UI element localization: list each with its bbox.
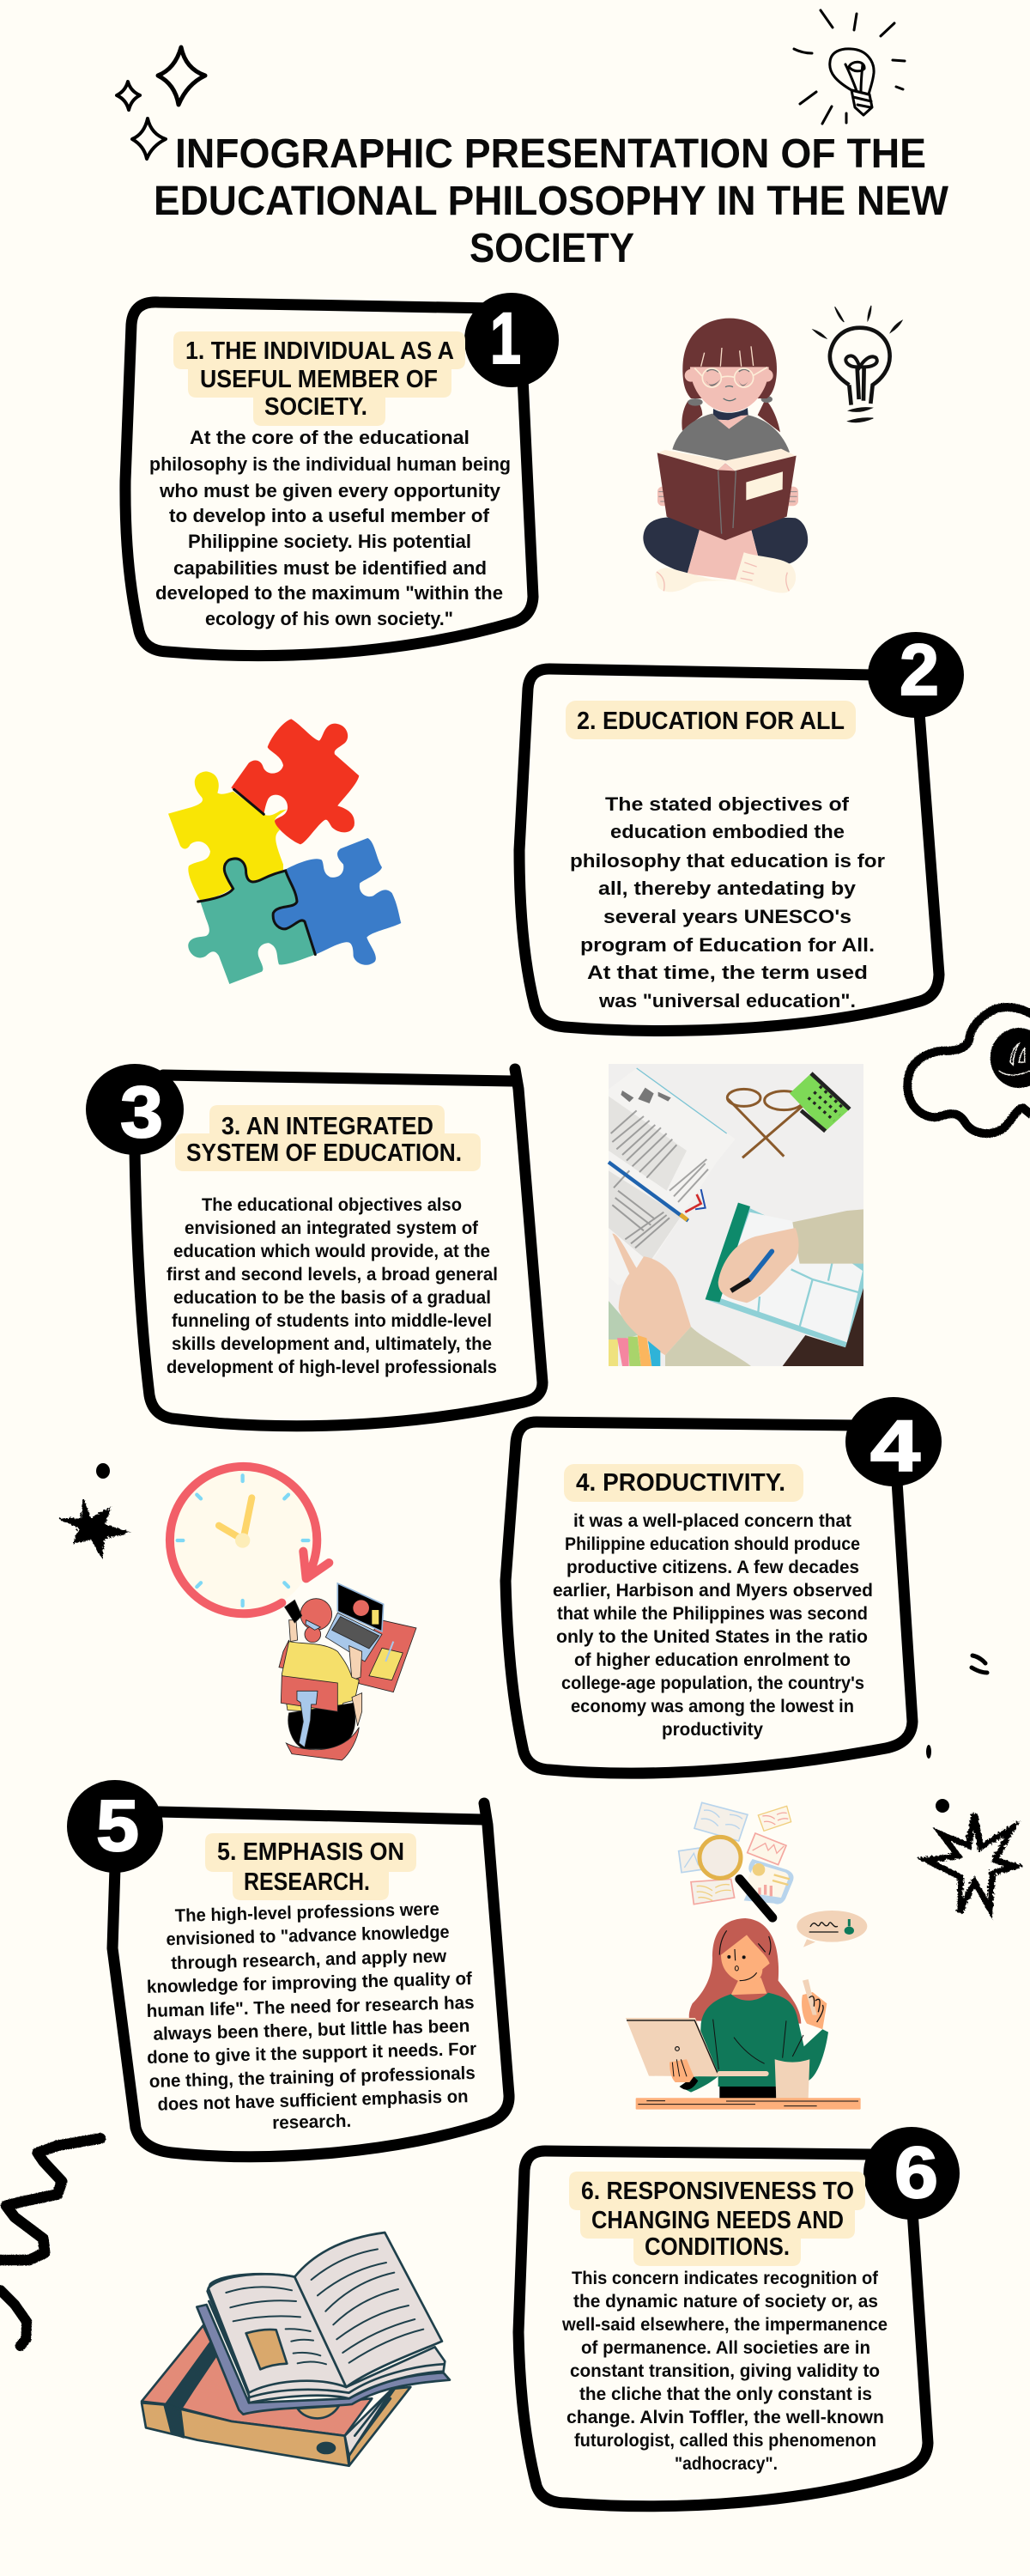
doodle: star left	[59, 1498, 127, 1555]
panel frame 3	[135, 1069, 542, 1426]
title: SOCIETY	[470, 226, 634, 271]
body text 3: funneling of students into middle-level	[172, 1311, 492, 1331]
body text 6: change. Alvin Toffler, the well-known	[566, 2408, 884, 2427]
heading 1: 1. THE INDIVIDUAL AS A	[185, 337, 454, 365]
body text 3: envisioned an integrated system of	[185, 1218, 479, 1238]
heading 2	[566, 701, 856, 739]
body text 3: education which would provide, at the	[173, 1242, 490, 1261]
body text 1: to develop into a useful member of	[169, 505, 490, 526]
heading 1	[173, 331, 465, 426]
body text 4: Philippine education should produce	[565, 1534, 860, 1554]
body text 5: The high-level professions were	[175, 1899, 439, 1926]
title	[154, 131, 949, 271]
body text 1: At the core of the educational	[190, 427, 470, 448]
body text 2: was "universal education".	[598, 990, 856, 1012]
body text 4: economy was among the lowest in	[571, 1697, 854, 1716]
number badge 2: 2	[900, 629, 939, 710]
body text 6: This concern indicates recognition of	[572, 2269, 879, 2288]
heading 4: 4. PRODUCTIVITY.	[576, 1469, 785, 1497]
body text 5: envisioned to "advance knowledge	[166, 1923, 450, 1949]
body text 5: one thing, the training of professionals	[149, 2063, 476, 2092]
body text 3: The educational objectives also	[202, 1195, 462, 1215]
heading 1: SOCIETY.	[264, 393, 367, 421]
number badge 4: 4	[870, 1406, 920, 1486]
icon: sparkles	[117, 47, 205, 159]
body text 6: of permanence. All societies are in	[581, 2338, 870, 2358]
panel frame 5	[112, 1803, 509, 2157]
body text 1: ecology of his own society."	[205, 608, 453, 629]
body text 5: human life". The need for research has	[146, 1993, 475, 2021]
panel: 3 integrated system	[86, 1064, 542, 1426]
heading 5	[205, 1833, 416, 1900]
body text 5: done to give it the support it needs. For	[147, 2039, 476, 2068]
body text 3: skills development and, ultimately, the	[172, 1334, 492, 1354]
body text 3: development of high-level professionals	[167, 1358, 497, 1377]
heading 6	[569, 2172, 865, 2266]
number badge 1	[464, 293, 559, 387]
body text 6: well-said elsewhere, the impermanence	[561, 2315, 888, 2335]
body text 6: the cliche that the only constant is	[579, 2385, 872, 2404]
body text 4: productivity	[662, 1720, 763, 1740]
body text 1: developed to the maximum "within the	[155, 582, 503, 604]
heading 3: SYSTEM OF EDUCATION.	[186, 1139, 462, 1167]
heading 4	[564, 1464, 803, 1502]
number badge 3: 3	[120, 1072, 163, 1152]
body text 1	[149, 427, 511, 629]
body text 6	[561, 2269, 888, 2474]
heading 5: RESEARCH.	[244, 1868, 370, 1896]
body text 5: knowledge for improving the quality of	[147, 1969, 473, 1997]
body text 5: does not have sufficient emphasis on	[157, 2087, 469, 2115]
doodle: small mark	[926, 1745, 931, 1759]
body text 4: college-age population, the country's	[561, 1674, 864, 1693]
heading 1: USEFUL MEMBER OF	[200, 366, 438, 393]
number badge 3	[86, 1064, 184, 1155]
body text 5: always been there, but little has been	[153, 2016, 470, 2044]
body text 3	[167, 1195, 498, 1377]
body text 4: only to the United States in the ratio	[556, 1627, 868, 1647]
heading 6: CHANGING NEEDS AND	[591, 2207, 844, 2234]
panel: 2 education for all	[519, 629, 964, 1030]
body text 2: philosophy that education is for	[570, 850, 885, 872]
heading 6: 6. RESPONSIVENESS TO	[581, 2178, 854, 2205]
number badge 5: 5	[96, 1785, 139, 1866]
body text 2: all, thereby antedating by	[598, 878, 857, 899]
heading 3	[175, 1105, 481, 1171]
body text 1: who must be given every opportunity	[159, 480, 501, 501]
body text 2	[570, 793, 885, 1012]
panel frame 6	[518, 2151, 928, 2506]
doodle: dot	[96, 1463, 110, 1479]
body text 2: program of Education for All.	[580, 934, 875, 956]
number badge 6	[863, 2127, 960, 2220]
body text 2: several years UNESCO's	[603, 906, 851, 927]
body text 4: productive citizens. A few decades	[566, 1558, 859, 1577]
illustration: clock and worker	[170, 1467, 416, 1760]
body text 4: it was a well-placed concern that	[573, 1511, 851, 1531]
body text 4	[553, 1511, 873, 1740]
panel: 1 the individual	[125, 293, 559, 656]
body text 6: constant transition, giving validity to	[570, 2361, 880, 2381]
body text 6: "adhocracy".	[675, 2454, 778, 2474]
panel frame 1	[125, 302, 533, 656]
body text 4: that while the Philippines was second	[557, 1604, 868, 1624]
body text 4: of higher education enrolment to	[574, 1650, 851, 1670]
heading 2: 2. EDUCATION FOR ALL	[577, 708, 845, 735]
title: INFOGRAPHIC PRESENTATION OF THE	[175, 131, 926, 177]
number badge 1: 1	[490, 298, 521, 379]
heading 5: 5. EMPHASIS ON	[217, 1838, 404, 1866]
doodle: scribble cloud	[907, 1007, 1030, 1133]
body text 3: first and second levels, a broad general	[167, 1265, 498, 1285]
body text 5	[143, 1899, 478, 2136]
body text 1: philosophy is the individual human being	[149, 453, 511, 475]
doodle: squiggle	[0, 2138, 100, 2346]
body text 1: Philippine society. His potential	[188, 531, 471, 552]
icon: sketched light bulb	[794, 10, 905, 124]
doodle: star right	[925, 1813, 1014, 1911]
illustration: girl reading a book	[643, 306, 902, 592]
number badge 2	[868, 629, 964, 718]
body text 4: earlier, Harbison and Myers observed	[553, 1581, 873, 1601]
panel frame 4	[506, 1422, 912, 1773]
body text 1: capabilities must be identified and	[173, 557, 487, 579]
heading 6: CONDITIONS.	[645, 2233, 790, 2261]
body text 5: through research, and apply new	[171, 1947, 447, 1973]
illustration: stack of books	[142, 2233, 450, 2466]
number badge 4	[845, 1397, 942, 1486]
doodle: right dashes	[972, 1656, 987, 1673]
illustration: researcher with magnifier	[626, 1802, 867, 2110]
number badge 6: 6	[894, 2132, 938, 2213]
body text 2: education embodied the	[610, 821, 845, 842]
body text 3: education to be the basis of a gradual	[173, 1288, 491, 1308]
panel: 5 emphasis on research	[67, 1780, 509, 2157]
title: EDUCATIONAL PHILOSOPHY IN THE NEW	[154, 179, 949, 224]
panel frame 2	[519, 669, 939, 1030]
number badge 5	[67, 1780, 163, 1873]
body text 6: the dynamic nature of society or, as	[573, 2292, 878, 2312]
body text 5: research.	[272, 2111, 351, 2133]
doodle: dot	[936, 1799, 949, 1813]
illustration: puzzle pieces	[168, 719, 401, 984]
heading 3: 3. AN INTEGRATED	[221, 1113, 433, 1140]
panel: 4 productivity	[506, 1397, 942, 1773]
body text 6: futurologist, called this phenomenon	[574, 2431, 876, 2451]
body text 2: At that time, the term used	[587, 962, 868, 983]
body text 2: The stated objectives of	[605, 793, 850, 815]
photo: student writing at desk	[609, 1064, 863, 1366]
panel: 6 responsiveness	[518, 2127, 960, 2506]
